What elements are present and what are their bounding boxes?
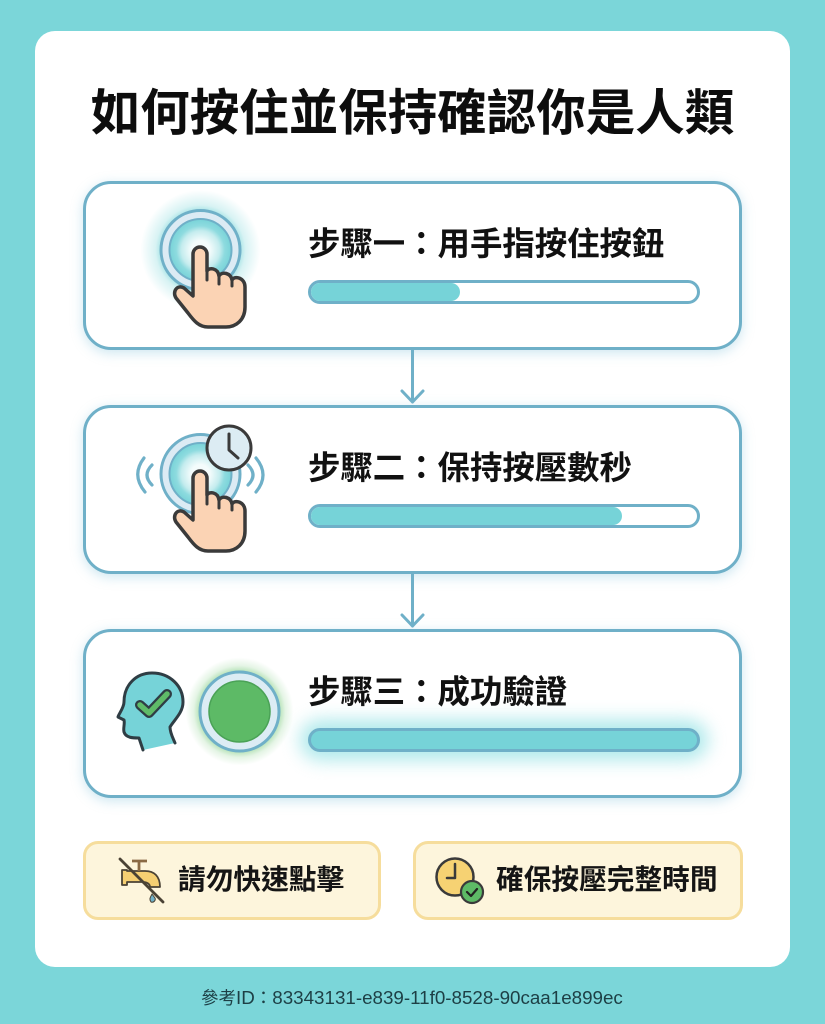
step 1 card	[83, 181, 742, 350]
step 3 card	[83, 629, 742, 798]
step 2 card	[83, 405, 742, 574]
step 1 heading: 步驟一：用手指按住按鈕	[308, 226, 664, 262]
step 3 heading: 步驟三：成功驗證	[308, 674, 567, 710]
step 1 progress bar	[308, 280, 700, 304]
title: 如何按住並保持確認你是人類	[91, 86, 734, 141]
tip text: complete hold time: 確保按壓完整時間	[496, 864, 718, 895]
tip box: complete hold time	[413, 841, 743, 920]
tip box: do not click quickly	[83, 841, 381, 920]
step 3 progress bar	[308, 728, 700, 752]
step 2 progress bar	[308, 504, 700, 528]
footer reference ID: 參考ID：83343131-e839-11f0-8528-90caa1e899ec	[201, 987, 623, 1008]
step 2 heading: 步驟二：保持按壓數秒	[308, 450, 632, 486]
step 3 bar glow	[300, 720, 708, 760]
tip text: do not click quickly: 請勿快速點擊	[178, 864, 344, 895]
